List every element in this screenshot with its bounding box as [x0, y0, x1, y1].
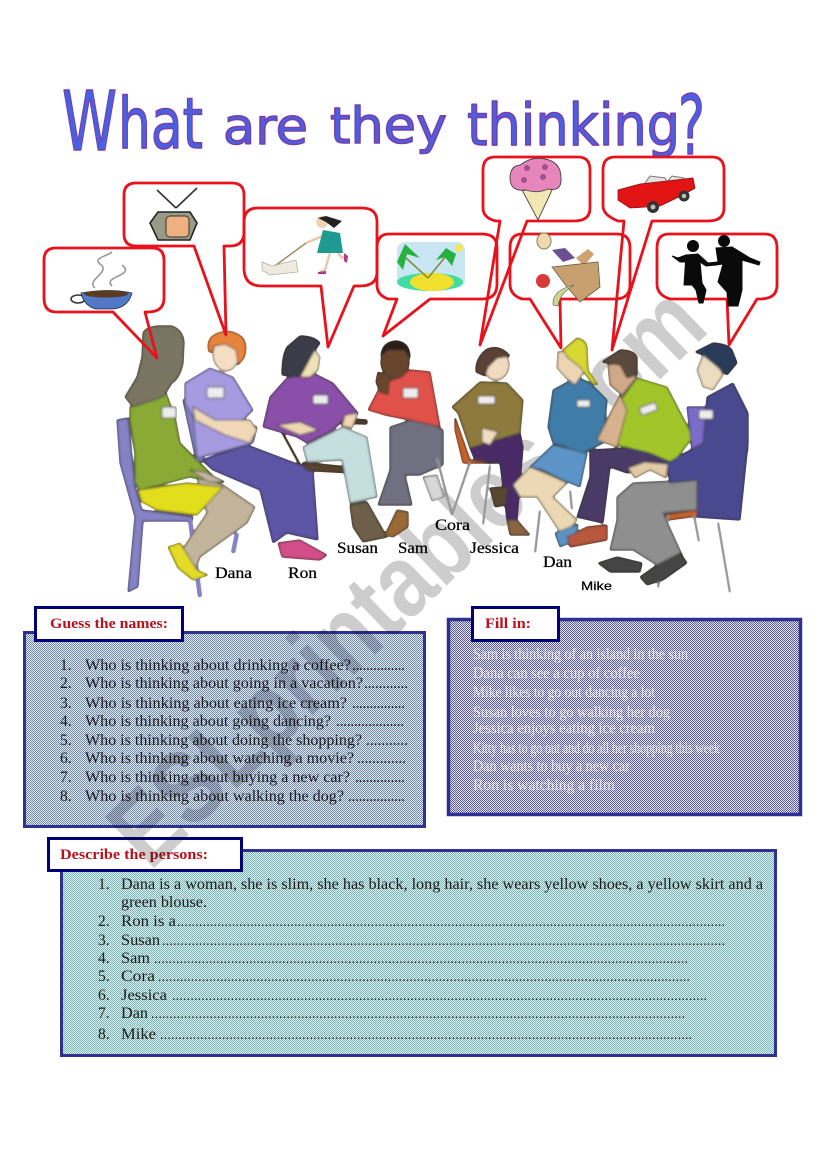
white fill-in sentences	[473, 646, 720, 794]
description list: 4.	[98, 950, 110, 967]
tab: fill in	[472, 608, 558, 640]
speech bubble: ice cream	[480, 157, 590, 345]
question list: 8.	[60, 788, 72, 805]
description list: Sam	[121, 950, 150, 967]
icon: girl walking dog	[262, 216, 348, 275]
description list: Ron is a	[121, 913, 176, 930]
person name labels	[215, 517, 612, 593]
speech bubble: beach island	[377, 234, 497, 336]
description list: 6.	[98, 987, 110, 1004]
question list: ............	[364, 675, 408, 692]
title: W	[62, 75, 117, 170]
white fill-in sentences: Susan loves to go walking her dog	[473, 704, 670, 721]
description list: ..................................................................................................................................................	[151, 1007, 685, 1022]
description list: Susan	[121, 932, 160, 949]
description list: ..................................................................................................................................................	[154, 952, 688, 967]
white fill-in sentences: Ron is watching a film	[473, 777, 615, 794]
person: Dan	[567, 350, 693, 547]
icon: ice cream cone	[510, 158, 561, 220]
description list: ..................................................................................................................................................	[158, 970, 690, 985]
description list: 8.	[98, 1026, 110, 1043]
icon: red convertible car	[618, 176, 695, 213]
person: Mike	[598, 343, 748, 593]
question list: 2.	[60, 675, 72, 692]
question list: ...............	[352, 657, 405, 674]
person name labels: Ron	[288, 565, 317, 582]
person name labels: Jessica	[470, 540, 519, 557]
watermark: ESLprintables.com	[85, 263, 726, 888]
question list: ...............	[352, 695, 405, 712]
description list: Dan	[121, 1005, 148, 1022]
icon: dancing couple	[672, 236, 760, 306]
panel: describe the persons	[62, 850, 776, 1056]
description list: ......................................................................................................................................................	[177, 915, 725, 930]
person: Ron	[183, 331, 327, 560]
person name labels: Dana	[215, 565, 252, 582]
person: Dana	[117, 326, 255, 597]
icon: palm island	[397, 242, 465, 291]
question list	[60, 657, 408, 805]
person: Jessica	[437, 348, 530, 535]
description list: 3.	[98, 932, 110, 949]
white fill-in sentences: Dan wants to buy a new car	[473, 758, 631, 775]
question list: 4.	[60, 713, 72, 730]
description list: 1.	[98, 876, 110, 893]
question list: Who is thinking about going dancing?	[85, 713, 331, 730]
white fill-in sentences: Jessica enjoys eating ice cream	[473, 720, 655, 737]
title	[62, 75, 705, 174]
question list: Who is thinking about walking the dog?	[85, 788, 344, 805]
person name labels: Dan	[543, 554, 572, 571]
question list: 6.	[60, 750, 72, 767]
tab: guess the names: Guess the names:	[50, 616, 168, 632]
white fill-in sentences: Sam is thinking of an island in the sun	[473, 646, 688, 663]
description list: Jessica	[121, 987, 167, 1004]
description list: Dana is a woman, she is slim, she has black, long hair, she wears yellow shoes, a yellow skirt and a	[121, 876, 763, 893]
description list: 5.	[98, 968, 110, 985]
speech bubble: red car	[603, 157, 724, 350]
person name labels: Mike	[581, 579, 612, 593]
title: are	[223, 98, 308, 156]
speech bubble: dancing	[657, 234, 777, 345]
question list: 1.	[60, 657, 72, 674]
question list: Who is thinking about doing the shopping?	[85, 732, 362, 749]
description list: green blouse.	[121, 894, 207, 911]
description list	[98, 876, 763, 1043]
person name labels: Sam	[398, 540, 428, 557]
white fill-in sentences: Kitty has to go out and do all her shopping this week	[473, 740, 720, 757]
speech bubble: shopping	[510, 233, 630, 348]
question list: ................	[348, 788, 405, 805]
title: ?	[678, 79, 705, 174]
person: Susan	[263, 336, 387, 542]
speech bubble: television	[124, 183, 244, 335]
question list: ...........	[366, 732, 408, 749]
question list: Who is thinking about buying a new car?	[85, 769, 350, 786]
description list: 2.	[98, 913, 110, 930]
illustration: seated group of eight people	[117, 326, 748, 597]
tab: guess the names	[36, 608, 182, 640]
question list: 5.	[60, 732, 72, 749]
white fill-in sentences: Dana can see a cup of coffee	[473, 665, 640, 682]
icon: coffee cup	[71, 252, 132, 309]
tab: describe the persons: Describe the persons:	[60, 847, 208, 863]
person name labels: Cora	[435, 517, 470, 534]
speech bubble: walking the dog	[244, 208, 377, 347]
tab: describe the persons	[48, 838, 242, 870]
description list: ..................................................................................................................................................	[160, 1028, 692, 1043]
question list: 7.	[60, 769, 72, 786]
title: hat	[118, 83, 203, 165]
title: they	[330, 97, 447, 155]
description list: Cora	[121, 968, 155, 985]
person: blonde woman	[513, 338, 607, 553]
question list: Who is thinking about drinking a coffee?	[85, 657, 351, 674]
question list: Who is thinking about eating ice cream?	[85, 695, 347, 712]
panel: guess the names	[24, 632, 424, 826]
question list: Who is thinking about watching a movie?	[85, 750, 354, 767]
question list: .............	[357, 750, 406, 767]
person: Sam	[368, 341, 444, 537]
person name labels: Susan	[337, 540, 378, 557]
question list: ..............	[355, 769, 405, 786]
tab: fill in: Fill in:	[485, 616, 531, 632]
question list: 3.	[60, 695, 72, 712]
panel: fill in	[448, 620, 800, 814]
description list: ..................................................................................................................................................	[172, 989, 707, 1004]
description list: 7.	[98, 1005, 110, 1022]
question list: Who is thinking about going in a vacation?	[85, 675, 363, 692]
description list: .........................................................................................................................................................	[162, 934, 725, 949]
icon: grocery bag	[536, 233, 600, 306]
question list: ...................	[336, 713, 404, 730]
white fill-in sentences: Mike likes to go out dancing a lot	[473, 684, 656, 701]
speech bubble: coffee	[44, 248, 164, 358]
description list: Mike	[121, 1026, 156, 1043]
icon: television	[150, 188, 197, 240]
title: thinking	[467, 91, 680, 159]
